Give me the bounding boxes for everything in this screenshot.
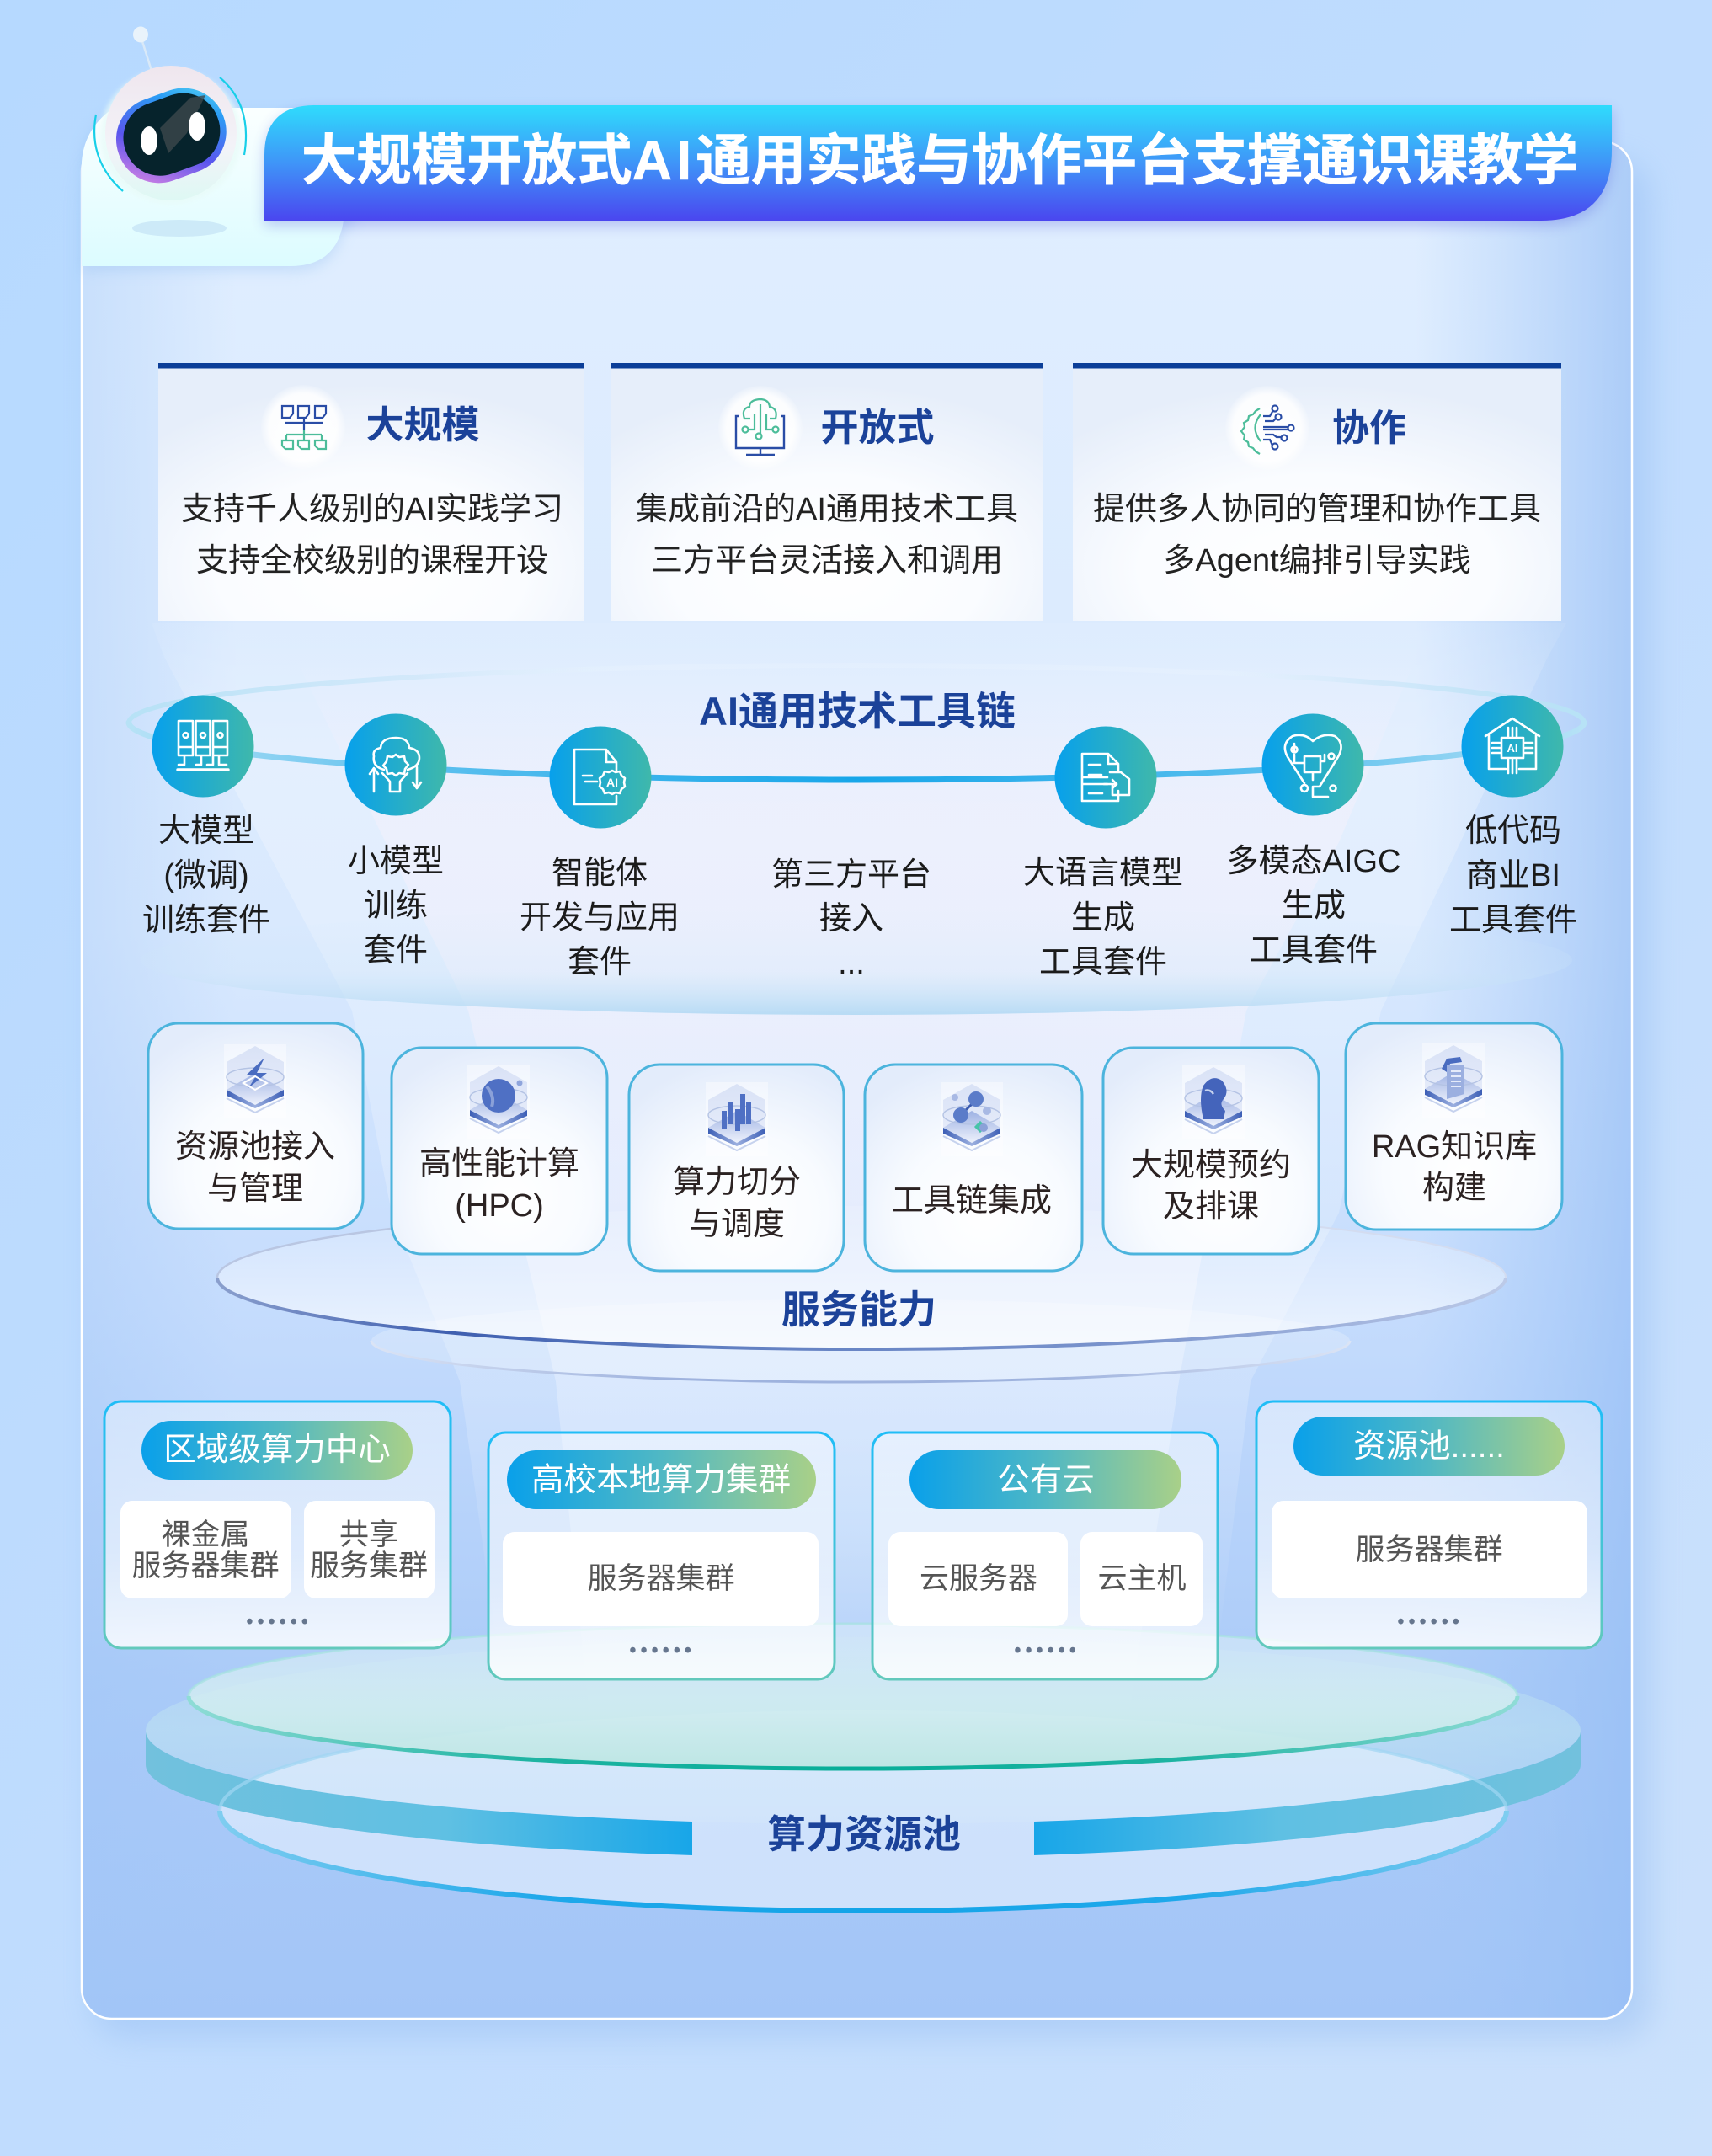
- pill: 区域级算力中心: [163, 1432, 391, 1468]
- service disc lower: [371, 1299, 1350, 1382]
- service card: 工具链集成: [865, 1065, 1082, 1271]
- sub box: 共享服务集群: 服务集群: [310, 1550, 428, 1582]
- toolchain lower disc: [141, 905, 1572, 1015]
- sub box: 共享服务集群: 共享: [339, 1518, 398, 1551]
- label: 生成: [1282, 889, 1346, 924]
- toolchain ring front: [129, 723, 1584, 780]
- label: 套件: [568, 945, 632, 980]
- description: [636, 492, 1018, 579]
- icon: AI chip house: [1462, 696, 1563, 797]
- label: 商业BI: [1466, 858, 1560, 894]
- label: 工具套件: [1449, 903, 1577, 938]
- toolchain ring back: [129, 665, 1584, 723]
- icon: head: [1182, 1065, 1245, 1139]
- compute pool heading: 算力资源池: [767, 1812, 961, 1856]
- label: [1131, 1148, 1291, 1225]
- label: 大模型: [158, 814, 254, 849]
- tool: 第三方平台接入: ...: [838, 946, 865, 981]
- icon: circuit heart: [1261, 714, 1364, 815]
- label: 智能体: [552, 856, 648, 891]
- label: 构建: [1422, 1171, 1486, 1206]
- label: 及排课: [1163, 1189, 1259, 1225]
- ellipsis: ......: [245, 1590, 311, 1633]
- feature card: 开放式: [611, 363, 1043, 621]
- description: [1093, 492, 1541, 579]
- tool: 大模型训练套件: [142, 696, 270, 938]
- label: [673, 1165, 801, 1242]
- feature card: 大规模: [158, 363, 584, 621]
- label: 高性能计算: [419, 1146, 579, 1182]
- label: [1449, 814, 1577, 938]
- sub box: 云主机: [1080, 1532, 1203, 1626]
- label: 与管理: [207, 1171, 303, 1207]
- pill: [507, 1450, 816, 1509]
- ellipsis: ......: [628, 1619, 694, 1662]
- compute pool: teal ring: [189, 1624, 1517, 1769]
- compute pool: blue ring: [220, 1727, 1507, 1911]
- label: [1372, 1129, 1537, 1206]
- heading: 协作: [1332, 408, 1406, 449]
- label: 开发与应用: [520, 900, 680, 936]
- description: 三方平台灵活接入和调用: [651, 543, 1003, 579]
- heading: 大规模: [365, 403, 480, 446]
- label: [1023, 856, 1183, 980]
- label: 多模态AIGC: [1227, 844, 1400, 879]
- label: 训练套件: [142, 903, 270, 938]
- icon: AI document: AI: [606, 776, 618, 789]
- description: 支持全校级别的课程开设: [196, 543, 548, 579]
- panel shadow: [93, 160, 1651, 2038]
- description: 集成前沿的AI通用技术工具: [636, 492, 1018, 527]
- icon: cloud monitor: [718, 386, 803, 470]
- service card: 高性能计算: [392, 1048, 607, 1254]
- icon: document: [1422, 1043, 1485, 1118]
- tool: 第三方平台接入: 接入: [819, 901, 883, 937]
- sub box: 云服务器: [888, 1532, 1068, 1626]
- label: (HPC): [455, 1188, 544, 1224]
- tool: 低代码商业BI工具套件: [1449, 696, 1577, 938]
- sub box: 服务器集群: [1272, 1501, 1587, 1598]
- robot tab: [82, 108, 354, 271]
- compute pool: large disc surface: [146, 1637, 1581, 1824]
- title: 大规模开放式AI通用实践与协作平台支撑通识课教学: [301, 130, 1578, 191]
- label: 大语言模型: [1023, 856, 1183, 891]
- label: 工具链集成: [892, 1183, 1052, 1219]
- main panel: [82, 141, 1632, 2019]
- label: 训练: [364, 889, 428, 924]
- label: 生成: [1071, 900, 1135, 936]
- icon: organisation tree: [261, 385, 345, 469]
- sub box: 裸金属服务器集群: 服务器集群: [131, 1550, 280, 1582]
- tool: 多模态AIGC生成工具套件: [1227, 714, 1400, 969]
- service card: RAG知识库构建: [1346, 1023, 1562, 1230]
- label: [142, 814, 270, 938]
- tool: 第三方平台接入: 第三方平台: [771, 857, 931, 893]
- ellipsis: ......: [1396, 1590, 1462, 1633]
- sub box: 服务器集群: 服务器集群: [1355, 1534, 1503, 1566]
- tool: 智能体开发与应用套件: [520, 726, 680, 980]
- service card: 资源池接入与管理: [148, 1023, 363, 1229]
- pill: [1293, 1417, 1565, 1476]
- resource card: 区域级算力中心: [104, 1401, 451, 1648]
- label: 资源池接入: [175, 1129, 335, 1165]
- icon: document transfer: [1054, 726, 1157, 829]
- label: 低代码: [1465, 814, 1561, 849]
- label: [175, 1129, 335, 1207]
- icon: AI chip house: AI: [1507, 742, 1517, 755]
- sub box: 裸金属服务器集群: 裸金属: [161, 1518, 250, 1551]
- label: 大规模预约: [1131, 1148, 1291, 1183]
- sub box: 服务器集群: [503, 1532, 819, 1626]
- description: 提供多人协同的管理和协作工具: [1093, 492, 1541, 527]
- sub box: 裸金属服务器集群: [120, 1501, 291, 1598]
- pill: 公有云: [997, 1462, 1095, 1498]
- resource card: 公有云: [872, 1433, 1218, 1679]
- ellipsis: ......: [1013, 1619, 1079, 1662]
- label: 套件: [364, 933, 428, 969]
- pill: [909, 1450, 1181, 1509]
- service disc upper: [217, 1206, 1506, 1349]
- label: [520, 856, 680, 980]
- pill: [141, 1421, 413, 1480]
- icon: cloud model: [345, 714, 446, 815]
- icon: molecules: [941, 1082, 1003, 1156]
- icon: bars: [706, 1082, 768, 1156]
- description: 支持千人级别的AI实践学习: [181, 492, 563, 527]
- label: 算力切分: [673, 1165, 801, 1200]
- toolchain heading: AI通用技术工具链: [699, 689, 1016, 734]
- sub box: 共享服务集群: [304, 1501, 435, 1598]
- sub box: 服务器集群: 服务器集群: [587, 1562, 735, 1595]
- label: 小模型: [348, 844, 444, 879]
- pill: 高校本地算力集群: [531, 1462, 791, 1498]
- label: [419, 1146, 579, 1224]
- resource card: 高校本地算力集群: [488, 1433, 835, 1679]
- tool: 第三方平台接入: [771, 857, 931, 981]
- robot mascot: [94, 27, 246, 237]
- label: 工具套件: [1250, 933, 1378, 969]
- label: 与调度: [689, 1207, 785, 1242]
- description: 多Agent编排引导实践: [1163, 543, 1471, 579]
- icon: gear and circuit: [1225, 386, 1309, 470]
- icon: sphere: [467, 1065, 530, 1139]
- label: [1227, 844, 1400, 969]
- description: [181, 492, 563, 579]
- icon: server racks: [152, 696, 254, 797]
- label: [348, 844, 444, 969]
- heading: 开放式: [820, 406, 935, 449]
- compute pool: blue ring fill: [220, 1710, 1507, 1911]
- tool: 小模型训练套件: [345, 714, 446, 969]
- icon: AI document: [549, 726, 652, 829]
- sub box: 云服务器: 云服务器: [920, 1562, 1037, 1595]
- icon: lightning: [224, 1044, 286, 1118]
- service card: 算力切分与调度: [629, 1065, 844, 1271]
- pill: 资源池......: [1353, 1428, 1505, 1465]
- title banner: [264, 105, 1612, 226]
- feature card: 协作: [1073, 363, 1561, 621]
- sub box: 云主机: 云主机: [1097, 1562, 1187, 1595]
- service card: 大规模预约及排课: [1103, 1048, 1319, 1254]
- service heading: 服务能力: [781, 1288, 936, 1331]
- resource card: 资源池: [1256, 1401, 1602, 1648]
- label: RAG知识库: [1372, 1129, 1537, 1165]
- tool: 大语言模型生成工具套件: [1023, 726, 1183, 980]
- compute pool: disc band: [146, 1731, 1581, 1855]
- label: (微调): [163, 858, 249, 894]
- label: 工具套件: [1039, 945, 1167, 980]
